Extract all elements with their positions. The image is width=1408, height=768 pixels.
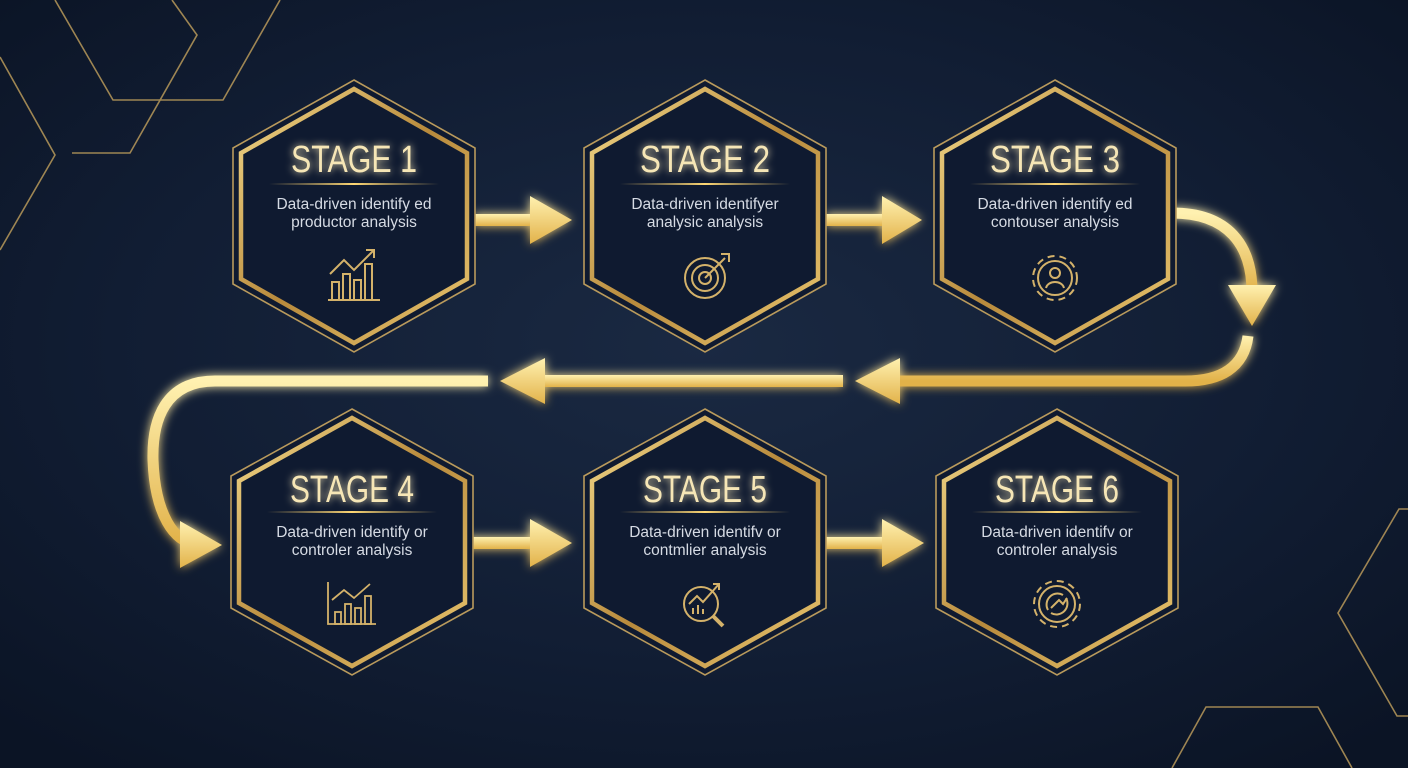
- text: description: Data-driven identify ed: [977, 196, 1133, 213]
- text: description: controler analysis: [292, 542, 413, 559]
- heading: STAGE 4: STAGE 4: [290, 469, 414, 511]
- panel: stage 4: [231, 409, 473, 675]
- arrow: return path right segment: [855, 336, 1248, 404]
- text: description: Data-driven identify ed: [276, 196, 432, 213]
- panel: stage 5: [584, 409, 826, 675]
- arrow: stage1 to stage2: [474, 196, 572, 244]
- heading: STAGE 2: STAGE 2: [640, 139, 770, 181]
- arrow: stage5 to stage6: [816, 519, 924, 567]
- panel: stage 6: [936, 409, 1178, 675]
- heading: STAGE 5: STAGE 5: [643, 469, 767, 511]
- text: description: Data-driven identifv or: [629, 524, 781, 541]
- heading: STAGE 1: STAGE 1: [291, 139, 417, 181]
- text: description: controler analysis: [997, 542, 1118, 559]
- text: description: Data-driven identifyer: [631, 196, 779, 213]
- arrow: curve stage3 down: [1172, 213, 1276, 326]
- heading: STAGE 6: STAGE 6: [995, 469, 1119, 511]
- text: description: Data-driven identify or: [276, 524, 428, 541]
- panel: stage 1: [233, 80, 475, 352]
- text: description: analysic analysis: [647, 214, 763, 231]
- arrow: stage2 to stage3: [826, 196, 922, 244]
- arrow: stage4 to stage5: [464, 519, 572, 567]
- icon: magnifier with chart: [684, 584, 723, 626]
- icon: target: [685, 254, 729, 298]
- text: description: productor analysis: [291, 214, 417, 231]
- icon: gear with person: [1033, 256, 1077, 300]
- heading: STAGE 3: STAGE 3: [990, 139, 1120, 181]
- text: description: Data-driven identifv or: [981, 524, 1133, 541]
- arrow: return path left curve to stage4: [153, 381, 488, 568]
- icon: bar chart axes: [328, 582, 376, 624]
- icon: bar chart growth: [328, 250, 380, 300]
- text: description: contmlier analysis: [643, 542, 767, 559]
- arrows: [153, 196, 1276, 568]
- text: description: contouser analysis: [991, 214, 1119, 231]
- panel: stage 3: [934, 80, 1176, 352]
- icon: gear with refresh: [1034, 581, 1080, 627]
- arrow: return path middle segment: [500, 358, 843, 404]
- panel: stage 2: [584, 80, 826, 352]
